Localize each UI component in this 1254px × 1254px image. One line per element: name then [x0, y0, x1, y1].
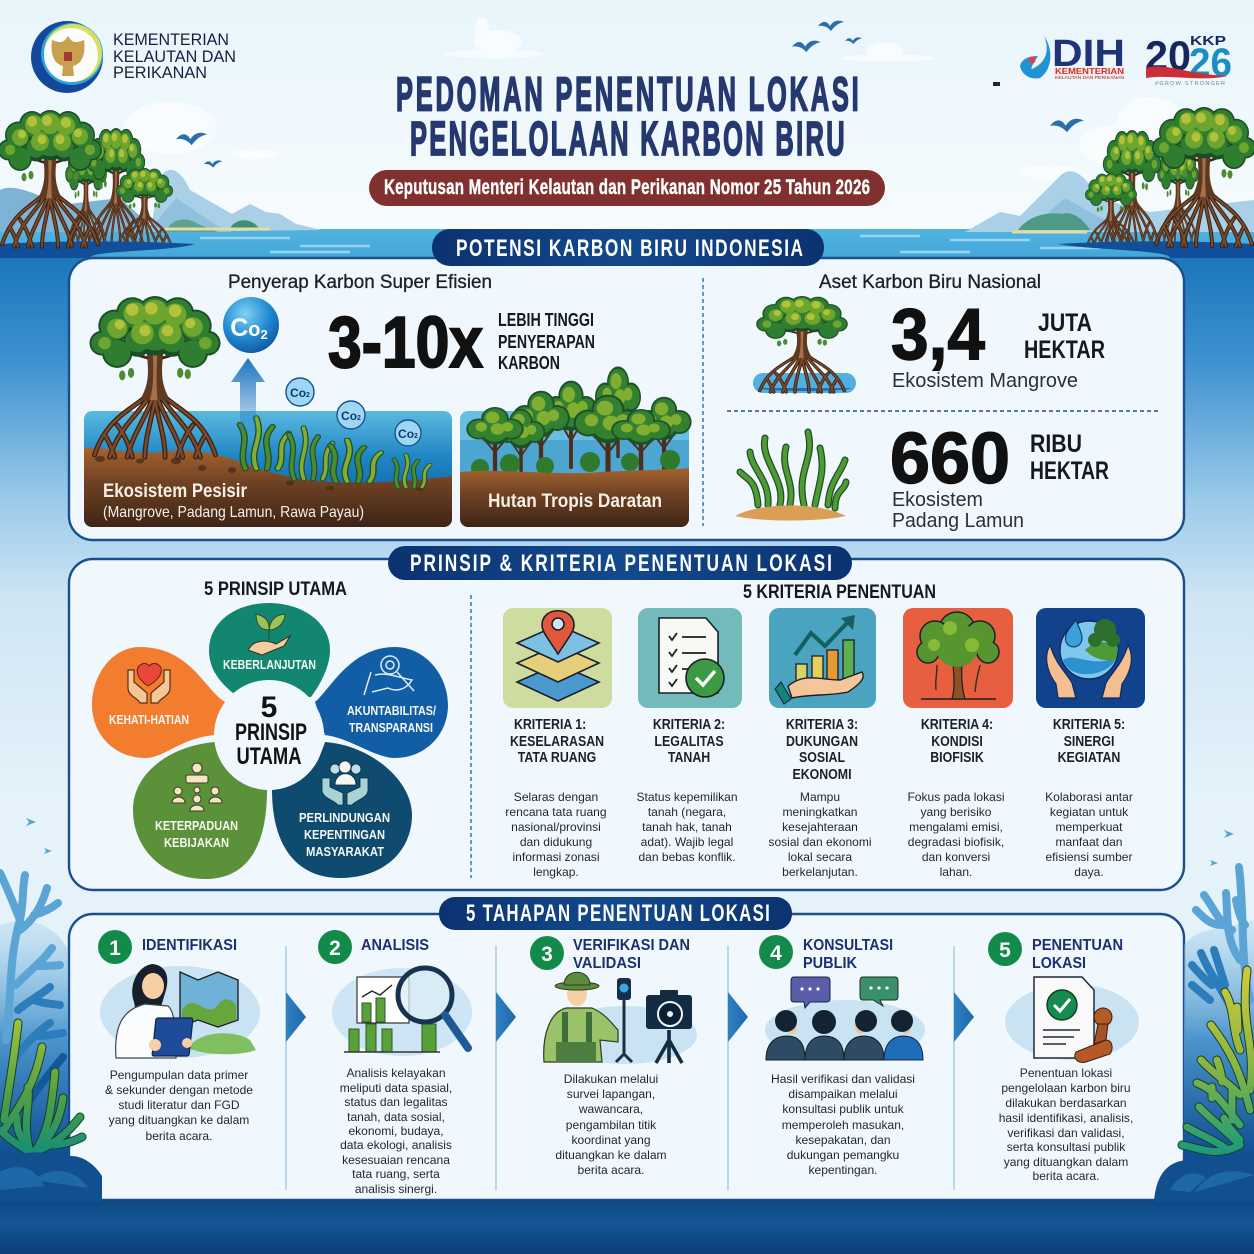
criterion 1 — [503, 608, 612, 708]
center hub: 5 — [261, 691, 277, 724]
criterion 5 text: daya. — [1074, 865, 1104, 879]
arrow 1 — [286, 992, 306, 1042]
heading: 5 prinsip utama: 5 PRINSIP UTAMA — [204, 579, 347, 600]
step 2 text: Analisis kelayakan — [346, 1066, 446, 1080]
petal: perlindungan masyarakat — [272, 742, 412, 878]
step 3 text: berita acara. — [578, 1163, 644, 1177]
CO2 bubbles — [286, 378, 421, 446]
stat: 660 ribu hektar: RIBU — [1030, 430, 1082, 458]
stat: 3-10x: 3-10x — [328, 303, 483, 383]
step 3 illustration — [544, 972, 697, 1064]
title: PENGELOLAAN KARBON BIRU — [410, 113, 845, 166]
petal: akuntabilitas: AKUNTABILITAS/ — [347, 703, 436, 718]
criterion 5 text: memperkuat — [1056, 820, 1123, 834]
KKP 2026 logo: 26 — [1189, 41, 1232, 85]
step 2 text: status dan legalitas — [344, 1095, 448, 1109]
criterion 5 text: kegiatan untuk — [1050, 805, 1129, 819]
stat: 660 ribu hektar: 660 — [890, 419, 1010, 499]
CO2 sphere: 2 — [261, 327, 268, 342]
step 2 heading — [318, 930, 429, 964]
criterion 2 text: Status kepemilikan — [636, 790, 738, 804]
criterion 4 text: lahan. — [940, 865, 972, 879]
criterion 5 — [1036, 608, 1145, 708]
criterion 4 — [903, 608, 1013, 708]
step 5 heading — [988, 932, 1123, 972]
stat: 660 ribu hektar: Ekosistem — [892, 489, 983, 511]
CO2 sphere — [223, 297, 279, 353]
criterion 5 text: KEGIATAN — [1058, 749, 1120, 765]
banner: prinsip: PRINSIP & KRITERIA PENENTUAN LOKASI — [410, 550, 832, 577]
panel: prinsip dan kriteria — [69, 559, 1184, 890]
criterion 4 text: KONDISI — [931, 733, 983, 749]
DIH logo: KEMENTERIAN — [1055, 66, 1124, 76]
petal: keberlanjutan: KEBERLANJUTAN — [223, 657, 316, 672]
step 4 text: kesepakatan, dan — [795, 1133, 891, 1147]
criterion 2 text: adat). Wajib legal — [641, 835, 733, 849]
criterion 4 text: KRITERIA 4: — [921, 716, 993, 732]
step 4 illustration — [765, 977, 925, 1060]
criterion 3 text: sosial dan ekonomi — [768, 835, 872, 849]
criterion 4 text: Fokus pada lokasi — [907, 790, 1005, 804]
step 5 text: yang dituangkan dalam — [1004, 1155, 1128, 1169]
step 3 text: koordinat yang — [571, 1133, 651, 1147]
banner: potensi: POTENSI KARBON BIRU INDONESIA — [456, 235, 803, 262]
criterion 1 text: TATA RUANG — [518, 749, 596, 765]
tropical forest scene — [460, 367, 692, 527]
icon: seagrass — [735, 432, 846, 520]
step 4 heading: PUBLIK — [803, 955, 857, 972]
step 2 text: analisis sinergi. — [355, 1182, 437, 1196]
CO2 sphere: Co — [230, 314, 261, 342]
step 4 heading: 4 — [770, 942, 782, 965]
step 5 text: Penentuan lokasi — [1020, 1066, 1112, 1080]
step 1 text: studi literatur dan FGD — [118, 1098, 240, 1112]
step 2 text: data ekologi, analisis — [340, 1138, 452, 1152]
forest label: Hutan Tropis Daratan — [488, 491, 662, 512]
center hub — [214, 680, 324, 790]
criterion 1 text: dan didukung — [520, 835, 592, 849]
criterion 5 text: efisiensi sumber — [1045, 850, 1133, 864]
step 2 text: kesesuaian rencana — [342, 1153, 450, 1167]
criterion 3 text: meningkatkan — [782, 805, 858, 819]
petal: kehati-hatian — [92, 647, 225, 758]
step 1 text: & sekunder dengan metode — [105, 1083, 253, 1097]
CO2 bubbles: Co2 — [341, 409, 361, 423]
petal: keterpaduan kebijakan: KETERPADUAN — [155, 818, 238, 833]
step 5 heading: 5 — [999, 939, 1011, 962]
background clouds — [124, 17, 1184, 179]
criterion 4 text: dan konversi — [922, 850, 990, 864]
background mountains — [0, 170, 1254, 232]
KKP 2026 logo: KKP — [1190, 33, 1226, 48]
petal: perlindungan masyarakat: PERLINDUNGAN — [299, 810, 390, 825]
stat: 3,4 juta hektar: JUTA — [1038, 309, 1092, 337]
criterion 2 text: TANAH — [668, 749, 710, 765]
CO2 bubbles: Co2 — [290, 386, 310, 400]
step 4 text: disampaikan melalui — [788, 1087, 898, 1101]
icon: mangrove — [753, 296, 856, 393]
step 2 heading: 2 — [329, 937, 341, 960]
step 3 text: Dilakukan melalui — [564, 1072, 658, 1086]
right coral reef — [1154, 830, 1254, 1202]
heading: aset karbon: Aset Karbon Biru Nasional — [819, 272, 1041, 293]
center hub: UTAMA — [236, 743, 302, 770]
stat: 660 ribu hektar: Padang Lamun — [892, 510, 1024, 532]
KKP 2026 logo: 20 — [1145, 32, 1191, 79]
heading: 5 kriteria penentuan: 5 KRITERIA PENENTUAN — [743, 582, 936, 603]
criterion 5 text: KRITERIA 5: — [1053, 716, 1125, 732]
criterion 2 text: tanah (negara, — [648, 805, 726, 819]
step 4 heading — [759, 935, 893, 972]
DIH logo — [1020, 33, 1125, 81]
criterion 3 text: SOSIAL — [799, 749, 845, 765]
ministry logo — [31, 21, 103, 93]
decree pill — [369, 170, 885, 206]
step 3 heading — [530, 936, 690, 972]
banner: tahapan: 5 TAHAPAN PENENTUAN LOKASI — [466, 900, 770, 927]
step 1 heading — [98, 930, 237, 964]
criterion 2 text: dan bebas konflik. — [638, 850, 736, 864]
criterion 2 text — [636, 716, 738, 864]
step 1 text: yang dituangkan ke dalam — [109, 1113, 249, 1127]
panel: potensi karbon biru — [69, 258, 1184, 540]
title: PEDOMAN PENENTUAN LOKASI — [396, 68, 859, 122]
criterion 2 text: LEGALITAS — [654, 733, 724, 749]
stat caption: PENYERAPAN — [498, 332, 595, 352]
step 1 heading: 1 — [109, 937, 121, 960]
petal: keterpaduan kebijakan — [133, 742, 267, 879]
banner: potensi — [432, 229, 824, 266]
criterion 4 text: yang berisiko — [921, 805, 992, 819]
left coral reef — [0, 818, 102, 1202]
criterion 1 text — [505, 716, 607, 879]
step 2 text — [340, 1066, 452, 1196]
step 4 text: konsultasi publik untuk — [782, 1102, 905, 1116]
step 4 text: dukungan pemangku — [787, 1148, 899, 1162]
step 5 text: serta konsultasi publik — [1007, 1140, 1126, 1154]
step 4 text: memperoleh masukan, — [782, 1118, 904, 1132]
CO2 arrow — [231, 358, 265, 432]
petal: keterpaduan kebijakan: KEBIJAKAN — [164, 835, 229, 850]
criterion 3 — [769, 608, 876, 708]
step 4 text: kepentingan. — [808, 1163, 878, 1177]
panel: tahapan — [69, 914, 1184, 1200]
petal: kehati-hatian: KEHATI-HATIAN — [109, 712, 189, 727]
criterion 1 text: informasi zonasi — [512, 850, 600, 864]
step 2 illustration — [332, 968, 472, 1056]
step 5 text: dilakukan berdasarkan — [1005, 1096, 1127, 1110]
CO2 bubbles: Co2 — [398, 427, 418, 441]
step 3 text: wawancara, — [578, 1102, 643, 1116]
coastal label — [103, 481, 364, 521]
step 1 heading: IDENTIFIKASI — [142, 937, 237, 954]
criterion 3 text: Mampu — [800, 790, 840, 804]
decree pill: Keputusan Menteri Kelautan dan Perikanan Nomor 25 Tahun 2026 — [384, 174, 870, 199]
step 5 illustration — [1005, 977, 1139, 1062]
KKP 2026 logo — [1145, 32, 1232, 87]
coastal label: Ekosistem Pesisir — [103, 481, 248, 502]
criterion 3 text: EKONOMI — [792, 766, 852, 782]
DIH logo: DIH — [1052, 33, 1125, 75]
criterion 5 text: Kolaborasi antar — [1045, 790, 1133, 804]
step 3 text: survei lapangan, — [567, 1087, 655, 1101]
criterion 3 text — [768, 716, 872, 879]
criterion 4 text: BIOFISIK — [930, 749, 984, 765]
step 5 text: verifikasi dan validasi, — [1007, 1126, 1125, 1140]
center hub: PRINSIP — [235, 719, 307, 746]
criterion 5 text — [1045, 716, 1133, 879]
criterion 3 text: DUKUNGAN — [786, 733, 858, 749]
step 1 illustration — [100, 964, 260, 1058]
DIH logo: KELAUTAN DAN PERIKANAN — [1055, 75, 1125, 81]
criterion 1 text: nasional/provinsi — [511, 820, 601, 834]
ministry name: PERIKANAN — [113, 64, 207, 82]
left mangrove trees — [0, 110, 195, 258]
criterion 3 text: kesejahteraan — [782, 820, 858, 834]
criterion 2 — [638, 608, 742, 708]
stat: 3,4 juta hektar: Ekosistem Mangrove — [892, 370, 1078, 392]
step 5 text: berita acara. — [1033, 1169, 1099, 1183]
step 2 heading: ANALISIS — [361, 937, 429, 954]
petal: akuntabilitas — [315, 647, 448, 758]
step 5 heading: PENENTUAN — [1032, 937, 1123, 954]
ministry name: KEMENTERIAN — [113, 31, 229, 49]
step 1 text: berita acara. — [146, 1129, 212, 1143]
ministry name — [113, 31, 236, 82]
criterion 5 text: SINERGI — [1064, 733, 1114, 749]
step 2 text: tata ruang, serta — [352, 1167, 440, 1181]
criterion 3 text: lokal secara — [788, 850, 852, 864]
heading: penyerap karbon: Penyerap Karbon Super Efisien — [228, 272, 492, 293]
step 3 text: dituangkan ke dalam — [555, 1148, 667, 1162]
KKP 2026 logo: #GROW STRONGER — [1155, 81, 1225, 87]
title — [396, 68, 859, 166]
criterion 4 text: mengalami emisi, — [909, 820, 1003, 834]
petal: perlindungan masyarakat: KEPENTINGAN — [304, 827, 385, 842]
step 5 text — [999, 1066, 1133, 1183]
criterion 3 text: berkelanjutan. — [782, 865, 858, 879]
stat: 3,4 juta hektar: HEKTAR — [1024, 336, 1105, 364]
criterion 5 text: manfaat dan — [1056, 835, 1122, 849]
petal: perlindungan masyarakat: MASYARAKAT — [306, 844, 384, 859]
criterion 1 text: lengkap. — [533, 865, 579, 879]
step 2 text: meliputi data spasial, — [340, 1081, 452, 1095]
step 4 heading: KONSULTASI — [803, 937, 893, 954]
criterion 2 text: KRITERIA 2: — [653, 716, 725, 732]
criterion 3 text: KRITERIA 3: — [786, 716, 858, 732]
stat: 660 ribu hektar: HEKTAR — [1030, 457, 1109, 485]
arrow 4 — [954, 992, 974, 1042]
stat caption: KARBON — [498, 353, 560, 373]
stat: 660 ribu hektar — [890, 419, 1109, 532]
stat: 3,4 juta hektar — [891, 295, 1105, 392]
step 2 text: tanah, data sosial, — [347, 1110, 445, 1124]
step 5 heading: LOKASI — [1032, 955, 1086, 972]
banner: tahapan — [439, 897, 792, 930]
step 2 text: ekonomi, budaya, — [348, 1124, 444, 1138]
birds — [176, 21, 1084, 168]
criterion 2 text: tanah hak, tanah — [642, 820, 732, 834]
stray mark — [993, 82, 1000, 86]
arrow 3 — [728, 992, 748, 1042]
step 5 text: pengelolaan karbon biru — [1001, 1081, 1131, 1095]
petal: akuntabilitas: TRANSPARANSI — [349, 720, 433, 735]
stat caption: LEBIH TINGGI — [498, 310, 594, 330]
criterion 1 text: rencana tata ruang — [505, 805, 607, 819]
right mangrove trees — [1058, 107, 1254, 258]
step 3 heading: 3 — [541, 943, 553, 966]
ministry name: KELAUTAN DAN — [113, 48, 236, 66]
step 5 text: hasil identifikasi, analisis, — [999, 1111, 1133, 1125]
arrow 2 — [496, 992, 516, 1042]
coastal label: (Mangrove, Padang Lamun, Rawa Payau) — [103, 504, 364, 521]
step 4 text: Hasil verifikasi dan validasi — [771, 1072, 915, 1086]
coastal ecosystem scene — [84, 296, 452, 527]
criterion 4 text — [907, 716, 1005, 879]
criterion 1 text: Selaras dengan — [514, 790, 598, 804]
step 1 text: Pengumpulan data primer — [110, 1068, 248, 1082]
criterion 1 text: KRITERIA 1: — [514, 716, 586, 732]
petal: keberlanjutan — [209, 603, 330, 697]
step 1 text — [105, 1068, 253, 1143]
step 3 text — [555, 1072, 667, 1177]
stat: 3,4 juta hektar: 3,4 — [891, 295, 985, 375]
bottom water band — [0, 1200, 1254, 1254]
step 3 heading: VALIDASI — [573, 955, 641, 972]
criterion 1 text: KESELARASAN — [510, 733, 604, 749]
step 3 text: pengambilan titik — [566, 1118, 657, 1132]
stat caption — [498, 310, 595, 373]
step 4 text — [771, 1072, 915, 1177]
criterion 4 text: degradasi biofisik, — [908, 835, 1004, 849]
step 3 heading: VERIFIKASI DAN — [573, 937, 690, 954]
